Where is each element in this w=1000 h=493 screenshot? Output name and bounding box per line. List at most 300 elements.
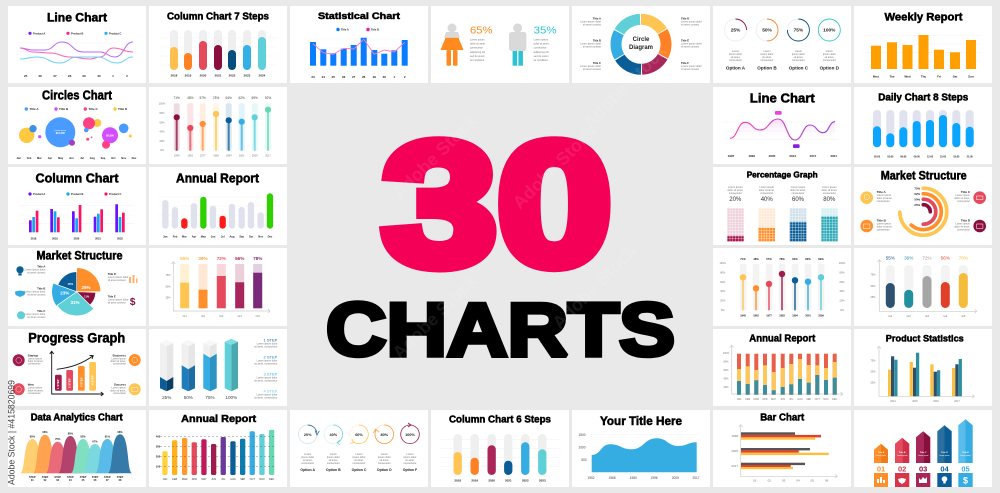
axis labels: 20% xyxy=(159,140,165,143)
title: Percentage Graph xyxy=(747,170,818,180)
axis labels: 1952 xyxy=(587,476,595,480)
year labels: 2021 xyxy=(830,154,837,158)
year labels: 2018 xyxy=(31,236,37,240)
option labels: Option C xyxy=(789,65,809,70)
right labels: Title F xyxy=(681,61,689,65)
axis labels: APR xyxy=(762,398,768,401)
right captions: consectetur xyxy=(957,200,970,203)
panel: circles chart xyxy=(8,87,146,164)
panel: market structure rings xyxy=(854,167,992,245)
title: Column Chart xyxy=(36,172,119,186)
year labels: 1999 xyxy=(748,154,755,158)
axis labels: 2017 xyxy=(692,476,700,480)
year labels: 2017 xyxy=(265,154,271,157)
date labels: 29 xyxy=(82,74,86,78)
captions: Lorem xyxy=(304,453,311,456)
axis labels: 50% xyxy=(165,286,171,289)
axis labels: №2 xyxy=(907,315,911,318)
title: Daily Chart 8 Steps xyxy=(878,92,969,103)
axis labels: 40% xyxy=(839,290,845,293)
panel: annual report stacked xyxy=(713,329,851,406)
panel: data analytics chart xyxy=(8,410,146,487)
trend arrow xyxy=(57,356,93,369)
axis labels: 20% xyxy=(839,300,845,303)
percent labels: 39% xyxy=(198,256,208,261)
year labels: 1994 xyxy=(792,314,798,318)
bubbles xyxy=(19,117,132,149)
day labels: Thu xyxy=(921,74,926,78)
icon: pie xyxy=(17,311,25,319)
panel: product statistics xyxy=(854,329,992,406)
left captions: consectetur xyxy=(28,392,41,395)
step numbers: 04 xyxy=(940,464,949,474)
axis labels: 60% xyxy=(720,281,726,284)
right captions: Title C xyxy=(961,190,971,194)
headline number: 30: 30 xyxy=(382,108,612,302)
step labels: STEP xyxy=(92,476,99,479)
axis labels xyxy=(870,360,960,403)
panel: line chart xyxy=(8,6,146,83)
axis labels: №2 xyxy=(201,315,206,318)
bars: 4 STEP xyxy=(91,375,95,385)
left captions: dolor sit amet, xyxy=(28,360,44,363)
step labels: Lorem ipsum dolor xyxy=(257,394,277,396)
month labels: APR xyxy=(192,478,197,481)
panel: stacked percent columns xyxy=(149,248,287,326)
captions: Lorem ipsum xyxy=(791,186,805,189)
right labels xyxy=(681,16,702,71)
bars: 2 STEP xyxy=(68,378,72,388)
grouped bars xyxy=(29,204,125,232)
step labels: sit amet, consectetur xyxy=(254,396,277,399)
month labels: DEC xyxy=(269,478,275,481)
date labels: 29 xyxy=(373,75,376,79)
axis labels xyxy=(578,433,700,480)
date labels xyxy=(311,75,406,79)
month labels: Nov xyxy=(258,234,264,238)
month labels: Sep xyxy=(101,156,106,160)
right labels: Title E xyxy=(681,38,689,42)
percent labels: 75% xyxy=(55,437,61,441)
captions: Lorem ipsum xyxy=(822,186,837,189)
option labels: Option F xyxy=(403,468,418,472)
year labels: 2022 xyxy=(229,74,236,78)
month labels: MAY xyxy=(201,478,207,481)
area chart xyxy=(592,438,697,472)
option labels: Option B xyxy=(326,468,341,472)
axis labels: 1980 xyxy=(630,476,637,480)
captions: consectetur xyxy=(327,462,340,465)
left labels: sit amet consect xyxy=(27,294,46,296)
percent labels: 75% xyxy=(205,395,215,400)
step labels: Lorem ipsum dolor xyxy=(257,376,277,380)
month labels: AUG xyxy=(230,478,236,481)
percent labels: 56% xyxy=(235,256,244,261)
ring 20% xyxy=(298,425,319,444)
stat: 65%: 65% xyxy=(470,24,492,36)
captions: ipsum dolor xyxy=(823,53,836,56)
captions: sit amet, xyxy=(731,56,741,59)
arrow 01: Lorem ipsum xyxy=(876,455,887,457)
columns xyxy=(180,264,262,308)
text: Adobe Stock xyxy=(389,270,481,363)
option labels: Option D xyxy=(377,468,392,472)
month labels: Aug xyxy=(90,156,95,160)
title: Statistical Chart xyxy=(318,11,401,22)
percent labels: 64% xyxy=(226,96,232,100)
axis labels: 100% xyxy=(723,352,730,355)
captions: Lorem xyxy=(795,50,802,53)
captions: consectetur xyxy=(761,59,774,62)
title: Data Analytics Chart xyxy=(31,413,123,424)
axis labels: MAR xyxy=(754,398,759,401)
ring values xyxy=(304,433,415,437)
stacked bars: red xyxy=(737,354,837,395)
year labels: 1977 xyxy=(766,314,772,318)
line series xyxy=(20,42,133,63)
year labels: 2021 xyxy=(505,479,512,483)
grid 60% xyxy=(790,208,806,241)
year labels: 2013 xyxy=(789,154,796,158)
axis labels: 1500 xyxy=(578,433,586,437)
left captions: consectetur xyxy=(877,228,890,232)
ring values: 75% xyxy=(794,28,804,34)
donut label: Diagram xyxy=(629,45,653,51)
time labels: 12:00 xyxy=(927,156,934,158)
axis labels xyxy=(719,262,846,312)
legend: Title D xyxy=(118,107,128,111)
axis labels: №5 xyxy=(961,315,966,318)
panel: your title here xyxy=(572,410,710,487)
axis labels: OCT xyxy=(815,398,820,401)
pie labels: 31% xyxy=(70,300,80,305)
year labels: 2001 xyxy=(239,154,245,157)
year labels: 2005 xyxy=(769,154,776,158)
line xyxy=(313,39,405,54)
captions: 20% xyxy=(729,197,742,203)
ring values xyxy=(914,186,921,207)
axis labels: 100% xyxy=(159,102,166,106)
captions: sit amet, xyxy=(329,459,338,462)
month labels: SEP xyxy=(240,478,246,481)
donut xyxy=(607,10,675,78)
right captions: consectetur xyxy=(113,363,126,366)
title: Line Chart xyxy=(750,91,816,105)
legend: Title A xyxy=(341,28,349,32)
step labels: 06 xyxy=(94,479,97,482)
title: Your Title Here xyxy=(600,416,682,428)
date labels: 26 xyxy=(38,74,42,78)
right captions xyxy=(110,353,126,395)
axes xyxy=(171,262,270,313)
axis labels: SEP xyxy=(806,398,812,401)
left labels: Title B xyxy=(37,286,45,290)
panel: column chart 7 steps xyxy=(149,6,287,83)
step labels: 08 xyxy=(119,479,122,482)
right labels: Lorem ipsum dolor xyxy=(108,298,129,302)
percent labels: 78% xyxy=(253,256,262,261)
percent labels: 62% xyxy=(805,257,811,261)
percent labels xyxy=(180,256,262,261)
option labels: Option B xyxy=(757,65,777,70)
month labels: JAN xyxy=(163,478,168,481)
stacked bars: yellow xyxy=(737,359,837,395)
text block: dolor sit amet xyxy=(470,43,485,46)
year labels xyxy=(728,154,837,158)
step labels: Lorem ipsum dolor xyxy=(257,342,277,346)
axis labels: №4 xyxy=(943,315,948,318)
title: Annual Report xyxy=(176,171,260,185)
axis labels: 80% xyxy=(839,272,845,275)
axis labels: 80% xyxy=(723,360,729,364)
ring values xyxy=(731,28,836,34)
percent labels: 57% xyxy=(200,96,206,100)
captions: consectetur xyxy=(729,59,742,62)
year labels: 2001 xyxy=(805,314,811,318)
year labels: 2017 xyxy=(810,154,817,158)
year labels: 2023 xyxy=(539,479,546,483)
arrow 01: Title A xyxy=(878,451,885,454)
month labels: OCT xyxy=(250,478,255,481)
captions: consectetur xyxy=(792,59,805,62)
percent labels: 96% xyxy=(42,430,48,434)
percent labels: 39% xyxy=(904,256,913,261)
captions: dolor sit amet, xyxy=(790,189,806,192)
date labels: 28 xyxy=(68,74,72,78)
legend: Title B xyxy=(59,107,69,111)
axis labels: 25% xyxy=(165,296,171,299)
legend: Product C xyxy=(109,31,122,35)
ring values: 40% xyxy=(329,433,338,437)
column 25% xyxy=(160,340,173,391)
right labels: sit amet consect xyxy=(681,68,699,71)
percent labels: 92% xyxy=(265,96,271,100)
time labels: 21:00 xyxy=(967,156,973,158)
headline word: CHARTS: CHARTS xyxy=(326,288,675,372)
time labels: 03:00 xyxy=(887,156,894,158)
axis labels: 0% xyxy=(840,309,845,312)
percent labels: 55% xyxy=(886,256,895,261)
percent labels: 86% xyxy=(68,432,74,436)
ring values: 80% xyxy=(380,433,389,437)
captions: sit amet, xyxy=(762,56,772,59)
sliders xyxy=(174,103,271,151)
ring values: 60% xyxy=(355,433,363,437)
percent labels: 85% xyxy=(30,434,36,438)
legend xyxy=(336,28,379,32)
bubbles: $8,000 xyxy=(106,134,114,138)
captions: Lorem xyxy=(381,453,388,456)
axes xyxy=(50,351,103,396)
left captions xyxy=(877,190,893,232)
month labels xyxy=(163,478,275,481)
captions: 80% xyxy=(823,197,836,203)
bell curves xyxy=(20,434,132,473)
axis labels: 40% xyxy=(723,378,729,380)
left captions: Startup xyxy=(28,353,38,357)
year labels xyxy=(174,154,271,157)
captions: dolor sit amet, xyxy=(759,189,775,192)
grid 80% xyxy=(821,208,838,241)
text block: adipiscing elit xyxy=(470,51,485,54)
left captions: dolor sit amet, xyxy=(28,389,44,392)
step labels: 3 STEP xyxy=(264,372,278,376)
date labels: 2 xyxy=(126,74,128,78)
option labels: Option A xyxy=(726,65,746,70)
date labels: 30 xyxy=(383,75,386,79)
month labels: Jun xyxy=(211,234,216,238)
arrow 04: Lorem ipsum xyxy=(939,455,950,457)
axis labels: 1998 xyxy=(731,434,738,438)
left labels xyxy=(25,264,46,319)
bars: 1 STEP xyxy=(56,379,60,389)
pie labels: 25% xyxy=(81,285,91,290)
panel: statistical chart xyxy=(290,6,428,83)
panel: percent pills xyxy=(854,248,992,326)
percent labels: 78% xyxy=(959,256,968,261)
captions: dolor sit amet, xyxy=(821,189,837,192)
right labels xyxy=(108,272,129,304)
panel: slider chart xyxy=(149,87,287,164)
month labels: Feb xyxy=(27,156,32,160)
year labels xyxy=(454,479,546,483)
month labels: Jul xyxy=(221,234,225,238)
bars xyxy=(871,35,976,69)
axis labels: 2005 xyxy=(731,449,738,453)
left labels: Title B xyxy=(593,38,601,42)
axis labels: 500 xyxy=(581,458,587,462)
text block: Lorem ipsum xyxy=(470,38,484,42)
year labels: 2019 xyxy=(52,236,58,240)
date labels: 2 xyxy=(404,75,406,79)
percent labels: 57% xyxy=(766,257,772,261)
panel: percentage graph xyxy=(713,167,851,245)
left labels: Title C xyxy=(593,61,601,65)
step labels: 07 xyxy=(106,479,109,482)
captions: Lorem xyxy=(330,453,337,456)
month labels: May xyxy=(201,234,206,238)
date labels: 23 xyxy=(311,75,315,79)
axis labels: 0% xyxy=(721,309,725,312)
month labels: May xyxy=(58,156,64,160)
step labels: 02 xyxy=(44,479,47,482)
percent labels: 50% xyxy=(184,395,193,400)
rings xyxy=(724,19,840,41)
date labels: 1 xyxy=(393,75,395,79)
arrow 01 xyxy=(874,444,888,463)
month labels: JUL xyxy=(221,478,226,481)
value labels: 300 xyxy=(156,445,161,449)
left labels: Lorem ipsum dolor xyxy=(25,313,45,316)
year labels: 1962 xyxy=(188,154,194,157)
captions: consectetur xyxy=(378,462,391,465)
text block: consectetur xyxy=(470,47,483,50)
grouped bars xyxy=(888,353,962,396)
date labels: 28 xyxy=(362,75,366,79)
percent labels xyxy=(30,430,123,444)
panel: annual report pills xyxy=(149,167,287,245)
left captions: dolor sit amet, xyxy=(877,226,893,228)
month labels: Jul xyxy=(80,156,84,160)
step labels: 1 STEP xyxy=(264,338,278,342)
left labels: sit amet consect xyxy=(583,24,601,26)
icon: dollar: $ xyxy=(130,297,136,308)
text block: Lorem ipsum xyxy=(534,38,548,42)
axis labels: 80% xyxy=(159,112,165,115)
day labels: Sun xyxy=(968,74,974,78)
year labels: 1994 xyxy=(226,154,232,157)
text block: tor incididunt xyxy=(470,59,484,62)
ring values: 20% xyxy=(304,433,312,437)
date labels: 25 xyxy=(332,75,335,79)
left labels: Title C xyxy=(37,309,45,313)
option labels xyxy=(726,65,840,70)
pills xyxy=(886,265,968,308)
panel: column chart 6 steps xyxy=(431,410,569,487)
arrow 02 xyxy=(895,438,909,463)
month labels: Oct xyxy=(111,156,116,160)
pills xyxy=(162,193,273,229)
captions: sit amet, xyxy=(825,56,834,59)
date labels: 25 xyxy=(24,74,28,78)
arrow 02: Lorem ipsum xyxy=(897,455,908,457)
title: Column Chart 7 Steps xyxy=(167,12,269,22)
captions: sit amet, xyxy=(380,459,389,462)
bars xyxy=(310,38,408,66)
tracks xyxy=(740,264,824,310)
title: Bar Chart xyxy=(760,412,805,424)
percent labels: 100% xyxy=(225,395,237,400)
column 75% xyxy=(203,340,217,391)
step labels: STEP xyxy=(80,476,87,479)
year labels: 1983 xyxy=(213,154,219,157)
donut label xyxy=(629,37,653,51)
time labels xyxy=(874,156,973,158)
percent labels xyxy=(886,256,968,261)
captions: ipsum dolor xyxy=(378,456,391,459)
axis labels: №5 xyxy=(256,315,260,318)
captions: consectetur xyxy=(760,192,773,195)
axis labels: NOV xyxy=(823,398,829,401)
step labels xyxy=(254,338,278,399)
axis labels xyxy=(165,274,260,318)
text block xyxy=(470,38,485,62)
percent labels: 98% xyxy=(117,430,123,434)
text: Adobe Stock xyxy=(509,120,601,213)
captions: sit amet, xyxy=(303,459,313,462)
date labels xyxy=(24,74,128,78)
captions: Lorem xyxy=(406,453,414,456)
pie chart xyxy=(52,268,101,316)
step labels: Lorem ipsum dolor xyxy=(257,360,277,362)
value labels: 100 xyxy=(156,464,161,468)
month labels: Mar xyxy=(182,234,187,238)
left captions: Lorem ipsum xyxy=(28,357,42,360)
right captions: Business xyxy=(113,353,126,357)
axis labels: 04 xyxy=(796,478,800,482)
step numbers: 03 xyxy=(919,464,927,474)
ring 100% xyxy=(401,423,419,444)
right captions: Lorem ipsum xyxy=(956,194,970,197)
right labels: Lorem ipsum dolor xyxy=(681,65,702,68)
month labels: NOV xyxy=(259,478,265,481)
text: Adobe Stock xyxy=(549,240,641,333)
month labels: Feb xyxy=(173,234,178,238)
donut label: Circle xyxy=(633,37,650,43)
step labels: STEP xyxy=(117,476,124,479)
percent labels: 72% xyxy=(922,256,932,261)
month labels: Oct xyxy=(249,234,253,238)
